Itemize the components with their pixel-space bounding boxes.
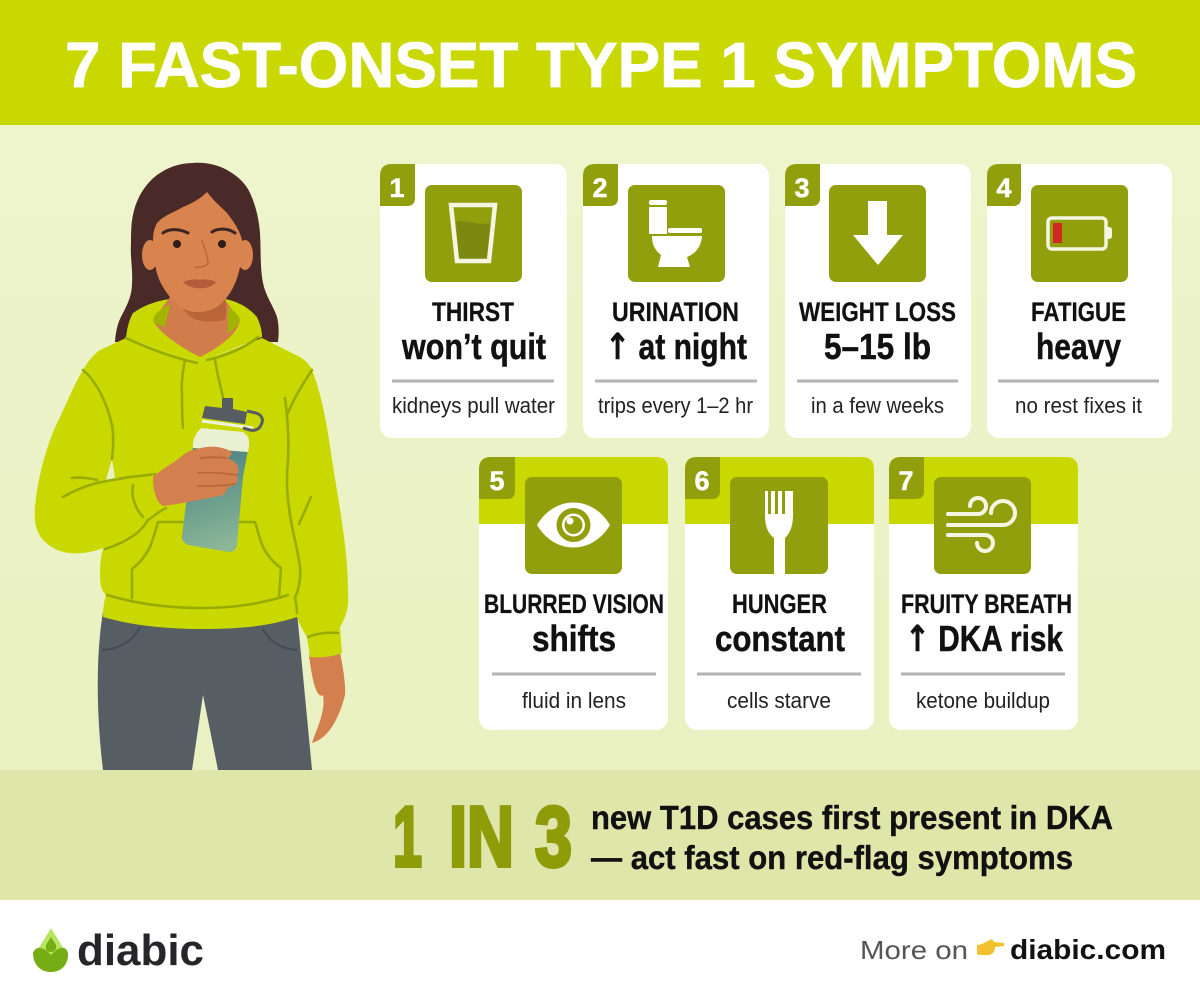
card 3: weight loss: 3 [794,173,810,203]
hoodie [35,338,348,657]
number tag [987,164,1021,206]
number tag [685,457,720,499]
right hand [309,652,345,743]
card 4: fatigue: FATIGUE [1031,297,1126,327]
callout text: new T1D cases first present in DKA [591,799,1113,836]
more on link: diabic.com [1010,934,1166,965]
card 7: fruity breath: 7 [898,466,914,496]
nose [195,240,208,267]
more on link: More on [860,935,968,965]
neck shadow [180,298,226,322]
card 5: blurred vision: 5 [489,466,505,496]
callout statistic: 3 [535,790,572,885]
card 3: weight loss: 5–15 lb [824,326,931,367]
card 6: hunger [685,457,874,730]
neck [153,297,240,357]
icon: pointing hand [977,939,1004,955]
card 7: fruity breath: FRUITY BREATH [901,589,1072,619]
logo drop icon [33,928,68,972]
card 2: urination: URINATION [612,297,739,327]
footer [0,900,1200,1000]
card 4: fatigue: no rest fixes it [1015,393,1142,418]
hood [126,299,262,362]
card 5: blurred vision: shifts [532,618,616,659]
card 1: thirst [380,164,567,438]
number tag [380,164,415,206]
left ear [142,240,158,270]
holding hand [153,447,238,506]
card 3: weight loss: WEIGHT LOSS [799,297,956,327]
card 5: blurred vision: fluid in lens [522,688,626,713]
eyes [173,240,226,248]
icon: fork [765,491,793,574]
card 5: blurred vision: BLURRED VISION [484,589,664,619]
card 2: urination: 2 [592,173,608,203]
trousers [98,612,312,770]
card 1: thirst: won’t quit [401,326,546,367]
card 2: urination [583,164,769,438]
right ear [237,240,253,270]
water bottle [182,398,262,552]
card 4: fatigue: heavy [1036,326,1121,367]
card 6: hunger: constant [715,618,845,659]
card 6: hunger: HUNGER [732,589,827,619]
card 3: weight loss: in a few weeks [811,393,944,418]
card 5: blurred vision [479,457,668,730]
icon: toilet [649,200,702,267]
icon: eye [537,502,610,548]
face [153,192,242,312]
card 1: thirst: 1 [389,173,405,203]
card 7: fruity breath: ↑ DKA risk [905,618,1064,660]
icon: down arrow [853,201,903,265]
eyebrows [163,229,235,233]
mouth [183,279,216,288]
card 4: fatigue: 4 [996,173,1012,203]
card 3: weight loss [785,164,971,438]
background [0,125,1200,770]
arm gap [106,459,115,480]
callout statistic: 1 [393,790,422,885]
icon: low battery [1048,218,1112,249]
card 6: hunger: 6 [694,466,710,496]
number tag [479,457,515,499]
callout statistic [393,790,572,885]
header band [0,0,1200,125]
callout band [0,770,1200,900]
hoodie seams [63,337,338,637]
callout statistic: IN [449,790,514,885]
card 7: fruity breath [889,457,1078,730]
number tag [583,164,618,206]
illustration: woman holding water bottle [35,163,348,770]
card 1: thirst: THIRST [432,297,514,327]
card 6: hunger: cells starve [727,688,831,713]
card 2: urination: ↑ at night [605,326,747,368]
logo: diabic [77,926,204,975]
card 4: fatigue [987,164,1172,438]
callout text [591,799,1113,876]
card 1: thirst: kidneys pull water [392,393,555,418]
more on link [860,934,1166,965]
card 7: fruity breath: ketone buildup [916,688,1050,713]
number tag [889,457,924,499]
title: 7 FAST-ONSET TYPE 1 SYMPTOMS [65,29,1137,101]
number tag [785,164,820,206]
icon: wind [948,498,1015,551]
callout text: — act fast on red-flag symptoms [591,839,1073,876]
hood lining [153,305,240,333]
hair [115,163,279,342]
card 2: urination: trips every 1–2 hr [598,393,753,418]
icon: glass of water [451,205,495,261]
